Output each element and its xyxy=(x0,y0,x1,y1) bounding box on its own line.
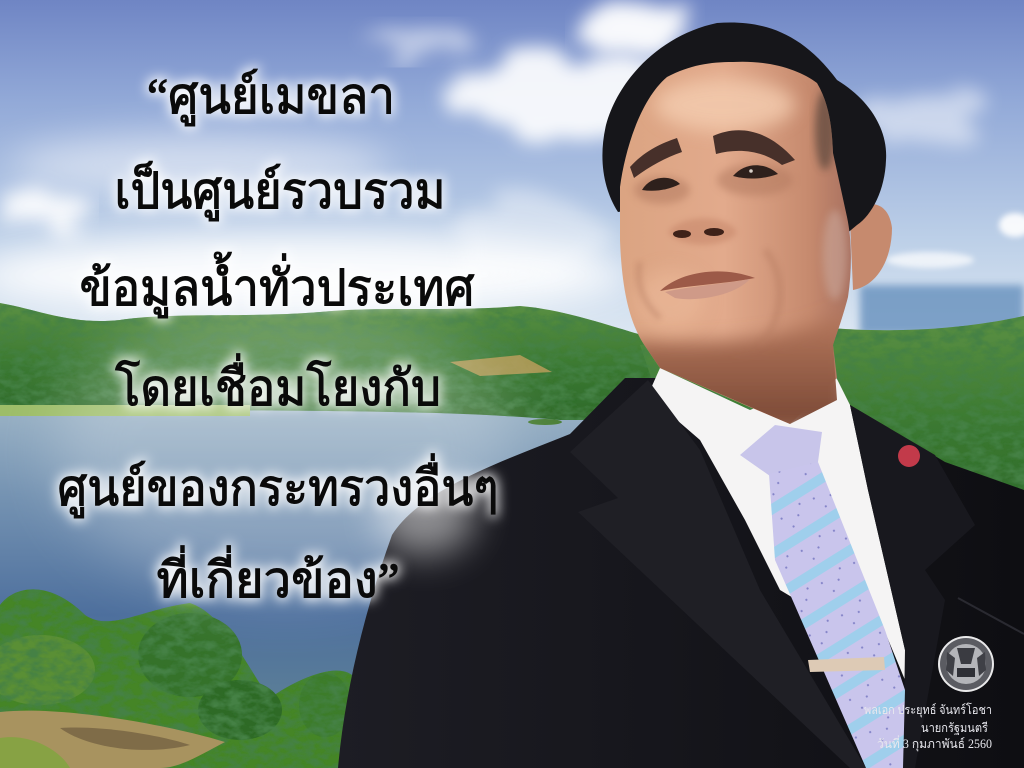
signature caption: พลเอก ประยุทธ์ จันทร์โอชา xyxy=(864,702,992,718)
quotation text: โดยเชื่อมโยงกับ xyxy=(115,354,441,416)
quote line 3: ข้อมูลน้ำทั่วประเทศ xyxy=(80,252,475,318)
lapel pin xyxy=(898,445,920,467)
signature caption: นายกรัฐมนตรี xyxy=(921,721,988,735)
soft highlight fading the left shoulder xyxy=(375,475,475,555)
ear xyxy=(850,204,892,290)
suit jacket xyxy=(338,378,1024,768)
cheek light xyxy=(823,210,847,300)
background: sky and clouds xyxy=(0,0,1024,345)
quote line 6: ที่เกี่ยวข้อง” xyxy=(156,546,400,608)
portrait figure xyxy=(338,23,1024,768)
temple shadow xyxy=(815,90,835,170)
face and neck xyxy=(620,62,851,424)
quote line 4: โดยเชื่อมโยงกับ xyxy=(115,354,441,416)
quotation text: “ศูนย์เมขลา xyxy=(147,68,395,126)
jacket lapel, right xyxy=(850,405,975,768)
white haze behind the quotation xyxy=(55,300,515,600)
eye socket shadows xyxy=(634,176,690,204)
quotation text: เป็นศูนย์รวบรวม xyxy=(114,161,446,221)
quote line 2: เป็นศูนย์รวบรวม xyxy=(114,161,446,221)
background: green hills xyxy=(0,303,1024,520)
jacket lapel, left xyxy=(570,380,866,768)
eyebrows xyxy=(630,138,682,178)
quote line 5: ศูนย์ของกระทรวงอื่นๆ xyxy=(58,454,498,518)
background: foreground trees xyxy=(0,589,352,768)
forehead highlight xyxy=(655,79,795,131)
eyes xyxy=(642,178,680,191)
tie clip xyxy=(808,657,885,672)
nose xyxy=(668,218,737,245)
quotation text: ที่เกี่ยวข้อง” xyxy=(156,546,400,608)
hair silhouette xyxy=(602,23,886,235)
icon: government seal xyxy=(938,636,994,692)
quotation text: ข้อมูลน้ำทั่วประเทศ xyxy=(80,252,475,318)
quotation text xyxy=(58,68,498,608)
necktie xyxy=(740,425,905,768)
mouth xyxy=(660,271,755,299)
neck shadow xyxy=(638,310,844,424)
signature caption xyxy=(864,702,992,752)
pocket seam xyxy=(958,598,1024,634)
background: lake xyxy=(0,405,640,705)
signature caption: วันที่ 3 กุมภาพันธ์ 2560 xyxy=(877,735,992,752)
cheek crease xyxy=(639,262,660,318)
shirt collar and front xyxy=(648,368,905,680)
quote line 1: “ศูนย์เมขลา xyxy=(147,68,395,126)
quotation text: ศูนย์ของกระทรวงอื่นๆ xyxy=(58,454,498,518)
